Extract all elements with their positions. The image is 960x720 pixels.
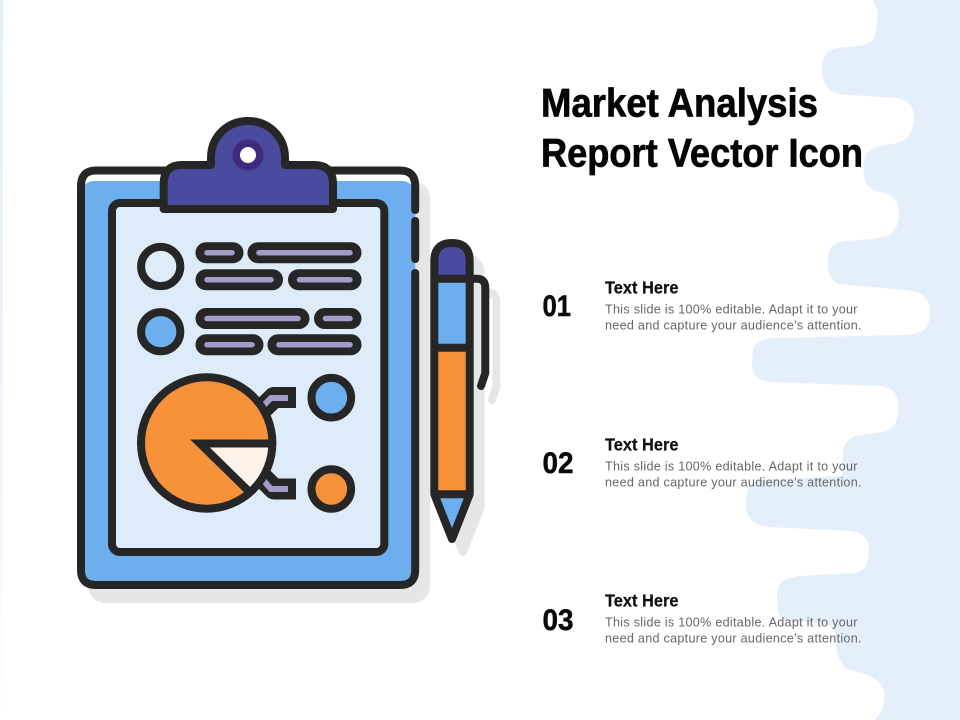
pen tip [434, 494, 470, 539]
pen outline [434, 243, 470, 539]
pen shadow [445, 257, 496, 552]
description 01: need and capture your audience’s attention. [605, 318, 862, 332]
pen cap [434, 243, 470, 279]
description 01 [605, 302, 862, 332]
pen clip [470, 279, 485, 386]
heading 02: Text Here [605, 434, 679, 454]
description 02 [605, 459, 862, 489]
clipboard clip [164, 121, 333, 209]
description 02: This slide is 100% editable. Adapt it to your [605, 459, 858, 473]
pie chart [141, 377, 272, 509]
heading 01: Text Here [605, 277, 679, 297]
blue bullet circle [141, 312, 180, 351]
pen lower barrel [434, 348, 470, 494]
title: Market Analysis [541, 82, 818, 126]
icon: clipboard report [81, 121, 430, 603]
clipboard shadow [88, 181, 430, 603]
background wavy blue shape [746, 0, 960, 720]
number 03: 03 [542, 604, 574, 637]
item 03 [542, 590, 862, 645]
heading 03: Text Here [605, 590, 679, 610]
outline bullet circle [141, 247, 180, 286]
description 03: need and capture your audience’s attention. [605, 631, 862, 645]
pen upper barrel [434, 279, 470, 348]
description 02: need and capture your audience’s attention. [605, 475, 862, 489]
description 03 [605, 615, 862, 645]
clipboard board [81, 170, 415, 585]
blue legend circle [312, 378, 351, 418]
number 01: 01 [542, 290, 571, 323]
icon: pen [434, 243, 496, 552]
description 01: This slide is 100% editable. Adapt it to your [605, 302, 858, 316]
item 02 [542, 434, 862, 489]
connector lines [256, 398, 296, 489]
orange legend circle [312, 469, 351, 509]
text line pills [206, 253, 351, 345]
description 03: This slide is 100% editable. Adapt it to your [605, 615, 858, 629]
number 02: 02 [542, 447, 574, 480]
item 01 [542, 277, 862, 332]
paper sheet [112, 203, 384, 552]
title [541, 82, 863, 176]
title: Report Vector Icon [541, 132, 863, 176]
